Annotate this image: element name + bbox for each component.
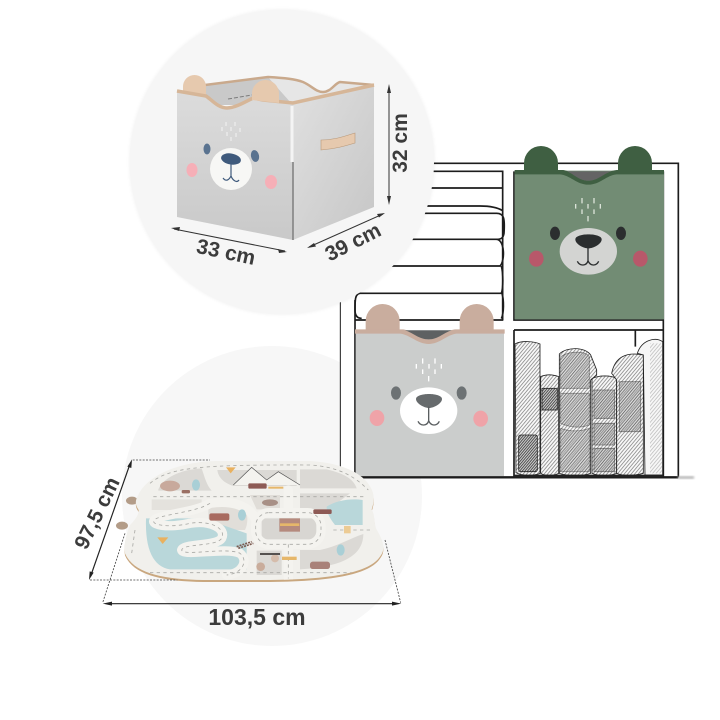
arrow: 103,5 cm — [103, 602, 401, 606]
book 2 — [541, 375, 559, 475]
box rim front — [177, 85, 374, 108]
mat edge — [125, 463, 383, 582]
box side panel — [293, 85, 374, 240]
grey box ears — [366, 304, 494, 330]
box ear left — [183, 75, 206, 97]
green box body — [515, 171, 664, 319]
arrow: 97,5 cm — [89, 459, 132, 580]
grey bear box — [355, 304, 505, 476]
book 5 — [612, 354, 643, 475]
mat grey areas — [152, 468, 363, 575]
box front panel — [177, 90, 293, 240]
mat road centre dashes — [132, 465, 370, 578]
book 6 — [637, 339, 663, 475]
circle: bottom background — [122, 346, 422, 646]
box rim back — [205, 77, 374, 92]
mat teal areas — [146, 499, 363, 569]
mat dashed guides — [90, 460, 401, 603]
label: 33 cm: 33 cm — [194, 235, 257, 270]
box interior — [200, 77, 293, 105]
label: 39 cm: 39 cm — [321, 219, 385, 266]
mat details — [157, 467, 351, 571]
box bear face — [186, 122, 277, 190]
arrow: 33 cm — [171, 227, 287, 253]
book 4 — [592, 376, 617, 475]
mat roads — [154, 490, 321, 578]
storage box with bear face and dimensions — [171, 75, 412, 270]
book 3 — [559, 349, 597, 475]
shelf unit: back frame and stacked pillows — [340, 163, 678, 478]
arrow: 32 cm — [387, 84, 391, 205]
grey box body — [356, 330, 504, 476]
label: 32 cm: 32 cm — [389, 113, 412, 173]
arrow: 39 cm — [307, 213, 385, 248]
label: 97,5 cm: 97,5 cm — [70, 474, 125, 553]
mat printed design — [132, 465, 370, 578]
books on shelf — [514, 339, 663, 476]
circle: top background — [130, 10, 434, 314]
box handle — [321, 133, 355, 150]
book 1 — [515, 342, 540, 475]
play mat with dimensions — [89, 459, 401, 606]
label: 103,5 cm: 103,5 cm — [208, 604, 306, 630]
grey box bear face — [370, 358, 488, 434]
green box bear face — [529, 198, 648, 275]
box ear right — [252, 80, 279, 103]
green box ears — [524, 146, 652, 173]
floor shadow — [678, 476, 694, 479]
mat surface — [125, 461, 383, 580]
mat ears — [116, 497, 138, 530]
green bear box — [515, 146, 664, 319]
